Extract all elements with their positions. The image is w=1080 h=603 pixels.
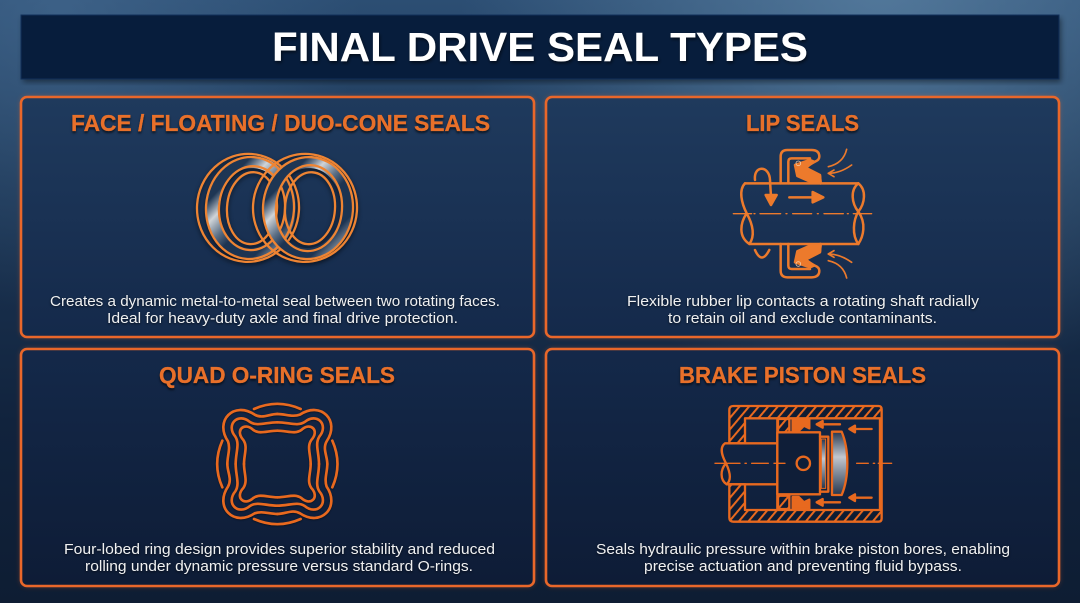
description: lip seals: Flexible rubber lip contacts a rotating shaft radially bbox=[627, 293, 980, 310]
icon: twin floating rings bbox=[193, 150, 361, 265]
description: lip seals bbox=[627, 293, 980, 327]
icon: brake piston cross-section bbox=[715, 406, 892, 522]
title: FINAL DRIVE SEAL TYPES bbox=[272, 24, 808, 70]
description: brake piston bbox=[596, 541, 1010, 575]
icon: quad ring bbox=[217, 404, 337, 524]
description: quad o-ring: rolling under dynamic pressure versus standard O-rings. bbox=[85, 558, 473, 575]
icon: lip seal on shaft bbox=[733, 149, 872, 278]
panel: quad o-ring seals bbox=[21, 349, 534, 586]
description: quad o-ring: Four-lobed ring design provides superior stability and reduced bbox=[64, 541, 495, 558]
panel: face / floating / duo-cone seals bbox=[21, 97, 534, 337]
title banner bbox=[21, 15, 1061, 82]
description: face seals: Creates a dynamic metal-to-metal seal between two rotating faces. bbox=[50, 293, 500, 310]
description: brake piston: Seals hydraulic pressure within brake piston bores, enabling bbox=[596, 541, 1010, 558]
description: brake piston: precise actuation and preventing fluid bypass. bbox=[644, 558, 962, 575]
heading: quad o-ring: QUAD O-RING SEALS bbox=[159, 362, 395, 388]
description: face seals bbox=[50, 293, 500, 327]
heading: brake piston: BRAKE PISTON SEALS bbox=[679, 362, 926, 388]
heading: lip seals: LIP SEALS bbox=[746, 110, 859, 136]
description: quad o-ring bbox=[64, 541, 495, 575]
panel: brake piston seals bbox=[546, 349, 1059, 586]
description: lip seals: to retain oil and exclude contaminants. bbox=[668, 310, 937, 327]
heading: face seals: FACE / FLOATING / DUO-CONE SEALS bbox=[71, 110, 490, 136]
panel: lip seals bbox=[546, 97, 1059, 337]
description: face seals: Ideal for heavy-duty axle and final drive protection. bbox=[107, 310, 458, 327]
